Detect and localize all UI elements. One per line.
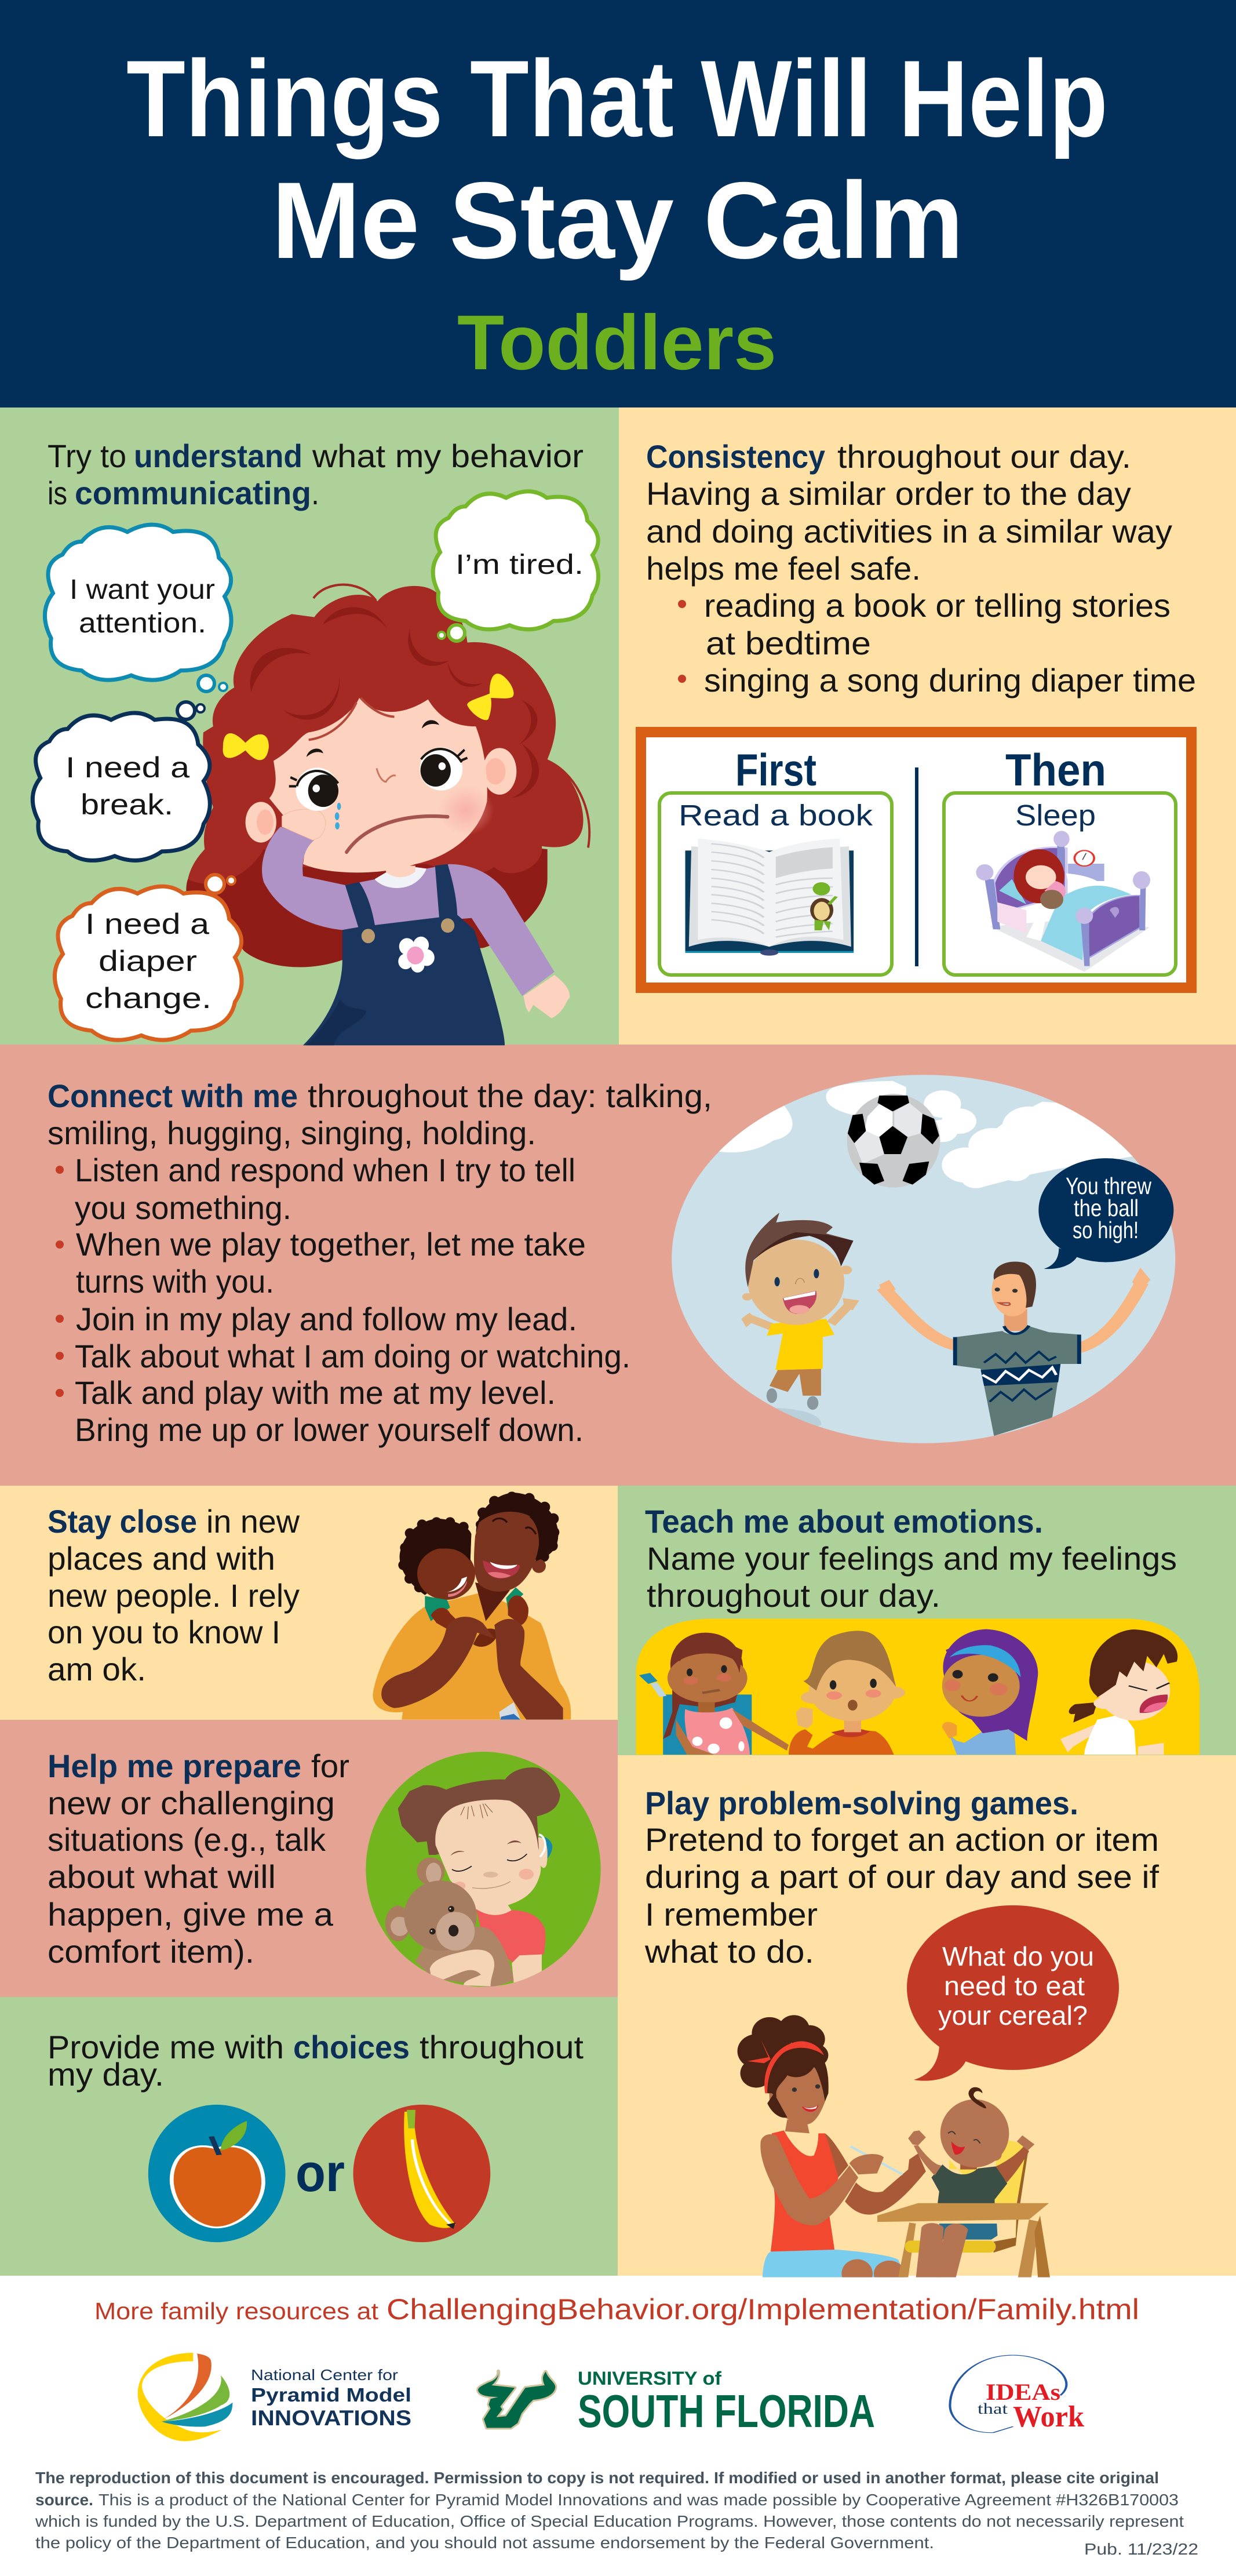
text: connect with me: Join in my play and follow my lead.	[76, 1301, 577, 1337]
panel: consistency	[619, 407, 1236, 1045]
label: or: or	[296, 2144, 345, 2203]
text: play problem-solving games	[644, 1785, 1159, 1970]
logo: IDEAs that Work: that	[978, 2400, 1008, 2417]
text: understand intro	[48, 438, 584, 511]
text: help me prepare: Help me prepare	[48, 1748, 301, 1784]
text: consistency: Consistency	[646, 438, 825, 475]
text: understand intro: .	[311, 475, 319, 511]
footer: resources link: More family resources at	[94, 2298, 379, 2324]
label: First: First	[735, 744, 816, 795]
text: stay close: am ok.	[48, 1651, 146, 1687]
speech bubble: diaper change: diaper	[99, 945, 197, 977]
text: connect with me: throughout the day: talking,	[308, 1078, 712, 1114]
logo: Pyramid Model Innovations: Pyramid Model	[251, 2384, 411, 2406]
panel: header band	[0, 0, 1236, 407]
speech bubble: attention	[45, 525, 231, 692]
panel: understand behavior	[0, 407, 619, 1045]
text: connect with me: Talk and play with me at my level.	[75, 1374, 556, 1411]
text: understand intro: communicating	[75, 475, 311, 511]
illustration: child hugging teddy bear	[366, 1752, 601, 1987]
text: connect with me	[48, 1078, 712, 1448]
logo: University of South Florida: SOUTH FLORIDA	[578, 2385, 875, 2437]
text: you threw the ball so high: so high!	[1073, 1217, 1139, 1243]
illustration: children with emotions	[636, 1619, 1199, 1755]
speech bubble: tired: I’m tired.	[455, 550, 584, 580]
icon: apple	[148, 2105, 286, 2242]
text: understand intro: understand	[134, 438, 302, 474]
text: connect with me: When we play together, let me take	[76, 1226, 586, 1262]
icon: soccer ball	[847, 1094, 940, 1188]
speech bubble: attention: I want your	[70, 574, 215, 605]
speech bubble: diaper change: change.	[85, 982, 212, 1014]
text: help me prepare	[48, 1748, 349, 1970]
text: choices: Provide me with	[48, 2029, 284, 2065]
logo: University of South Florida	[478, 2368, 875, 2437]
illustration: mother feeding baby	[738, 2015, 1050, 2288]
text: play problem-solving games: what to do.	[644, 1933, 814, 1970]
title	[126, 38, 1108, 281]
text: choices	[48, 2029, 584, 2093]
text: stay close	[48, 1503, 300, 1687]
text: help me prepare: for	[311, 1748, 349, 1784]
text: understand intro: is	[48, 475, 67, 511]
panel: choices	[0, 1997, 618, 2276]
text: connect with me: Connect with me	[48, 1078, 298, 1114]
text: stay close: places and with	[48, 1540, 275, 1577]
speech bubble: tired	[433, 492, 599, 641]
text: help me prepare: comfort item).	[48, 1933, 254, 1970]
panel: teach emotions	[618, 1486, 1236, 1755]
subtitle: Toddlers	[457, 300, 776, 386]
text: consistency: singing a song during diaper time	[704, 662, 1196, 698]
text: choices: throughout	[420, 2029, 584, 2065]
illustration: crying girl	[186, 585, 589, 1045]
text: stay close: in new	[206, 1503, 300, 1540]
text: connect with me: smiling, hugging, singing, holding.	[48, 1115, 536, 1151]
speech bubble: break	[32, 702, 210, 860]
speech bubble: attention: attention.	[79, 608, 206, 639]
title: Things That Will Help	[126, 38, 1108, 159]
text: connect with me: you something.	[75, 1189, 291, 1226]
child: girl in hijab	[942, 1629, 1038, 1755]
speech bubble: what do you need: your cereal?	[938, 2000, 1088, 2031]
text: connect with me: Talk about what I am doing or watching.	[75, 1338, 630, 1374]
text: connect with me: Bring me up or lower yourself down.	[75, 1411, 584, 1448]
first-then board	[641, 732, 1191, 988]
panel: connect with me	[0, 1045, 1236, 1486]
icon: open book	[685, 839, 854, 956]
panel: stay close	[0, 1486, 618, 1720]
logo: IDEAs that Work: Work	[1013, 2400, 1084, 2433]
text: choices: my day.	[48, 2056, 164, 2093]
first box	[659, 793, 892, 975]
text: stay close: Stay close	[48, 1503, 197, 1540]
speech bubble: what do you need: What do you	[942, 1941, 1094, 1971]
text: consistency: reading a book or telling stories	[704, 587, 1171, 624]
text: fine print: This is a product of the National Center for Pyramid Model Innovations and was made possible by Cooperative Agreement #H326B170003	[99, 2491, 1179, 2509]
text: teach me about emotions: throughout our day.	[647, 1577, 940, 1614]
text: help me prepare: happen, give me a	[48, 1896, 334, 1933]
speech bubble: break: I need a	[65, 751, 189, 784]
text: you threw the ball so high: You threw	[1066, 1173, 1151, 1199]
child: wheelchair girl	[639, 1633, 789, 1755]
footer: resources link: ChallengingBehavior.org/Implementation/Family.html	[387, 2293, 1139, 2326]
text: consistency: throughout our day.	[837, 438, 1131, 475]
speech bubble: break: break.	[81, 788, 173, 821]
text: teach me about emotions: Teach me about emotions.	[645, 1503, 1043, 1540]
text: help me prepare: about what will	[48, 1858, 276, 1895]
text: fine print	[35, 2469, 1184, 2552]
text: help me prepare: new or challenging	[48, 1785, 335, 1821]
text: publication date: Pub. 11/23/22	[1084, 2540, 1198, 2558]
text: fine print: the policy of the Department of Education, and you should not assume endorsement by the Federal Government.	[35, 2534, 934, 2552]
illustration: father carrying child	[373, 1491, 571, 1720]
text: you threw the ball so high	[1066, 1173, 1151, 1243]
speech bubble: diaper change: I need a	[85, 908, 209, 940]
child: crying girl	[1060, 1629, 1177, 1755]
text: play problem-solving games: I remember	[645, 1896, 818, 1933]
text: play problem-solving games: Play problem-solving games.	[645, 1785, 1078, 1821]
text: understand intro: Try to	[48, 438, 126, 474]
illustration: boy	[741, 1213, 859, 1410]
icon: banana	[353, 2105, 490, 2242]
child: surprised boy	[789, 1631, 905, 1755]
then box	[944, 793, 1176, 975]
text: consistency: Having a similar order to the day	[646, 475, 1131, 512]
text: help me prepare: situations (e.g., talk	[48, 1821, 326, 1858]
text: fine print: which is funded by the U.S. Department of Education, Office of Special Education Programs. However, those contents do not necessarily represent	[35, 2512, 1184, 2530]
first box: Read a book	[679, 799, 873, 832]
text: teach me about emotions: Name your feelings and my feelings	[647, 1540, 1177, 1577]
illustration: father	[879, 1262, 1150, 1436]
text: consistency: helps me feel safe.	[646, 550, 921, 587]
logo: Pyramid Model Innovations	[138, 2353, 411, 2442]
illustration: boy and father playing ball	[672, 1075, 1175, 1443]
speech bubble: what do you need	[907, 1905, 1119, 2081]
footer: resources link	[94, 2293, 1139, 2326]
text: teach me about emotions	[645, 1503, 1177, 1614]
panel: help me prepare	[0, 1720, 618, 1997]
text: connect with me: Listen and respond when I try to tell	[75, 1152, 575, 1188]
text: fine print: source.	[35, 2491, 93, 2509]
logo: University of South Florida: UNIVERSITY of	[578, 2368, 721, 2389]
text: connect with me: turns with you.	[76, 1263, 274, 1300]
logo: Pyramid Model Innovations: INNOVATIONS	[251, 2406, 411, 2430]
speech bubble: diaper change	[54, 875, 242, 1040]
text: play problem-solving games: during a part of our day and see if	[645, 1858, 1159, 1895]
text: choices: choices	[293, 2029, 410, 2065]
text: consistency	[646, 438, 1196, 698]
then box: Sleep	[1015, 799, 1096, 832]
text: you threw the ball so high: the ball	[1074, 1195, 1139, 1221]
text: play problem-solving games: Pretend to forget an action or item	[645, 1821, 1159, 1858]
text: consistency: at bedtime	[706, 625, 871, 661]
text: understand intro: what my behavior	[312, 438, 584, 474]
text: consistency: and doing activities in a similar way	[646, 513, 1172, 550]
icon: girl in bed	[976, 831, 1150, 972]
speech bubble: you threw the ball	[1038, 1158, 1173, 1269]
text: fine print: The reproduction of this document is encouraged. Permission to copy is not required. If modified or used in another format, please cite original	[35, 2469, 1159, 2487]
logo: Pyramid Model Innovations: National Center for	[251, 2366, 398, 2384]
panel: problem solving	[618, 1755, 1236, 2276]
logo: IDEAs that Work: IDEAs	[986, 2379, 1060, 2405]
title: Me Stay Calm	[272, 159, 964, 281]
label: Then: Then	[1005, 744, 1106, 795]
speech bubble: what do you need: need to eat	[944, 1971, 1085, 2001]
text: stay close: new people. I rely	[48, 1577, 300, 1614]
text: stay close: on you to know I	[48, 1614, 280, 1650]
logo: IDEAs that Work	[950, 2355, 1084, 2433]
